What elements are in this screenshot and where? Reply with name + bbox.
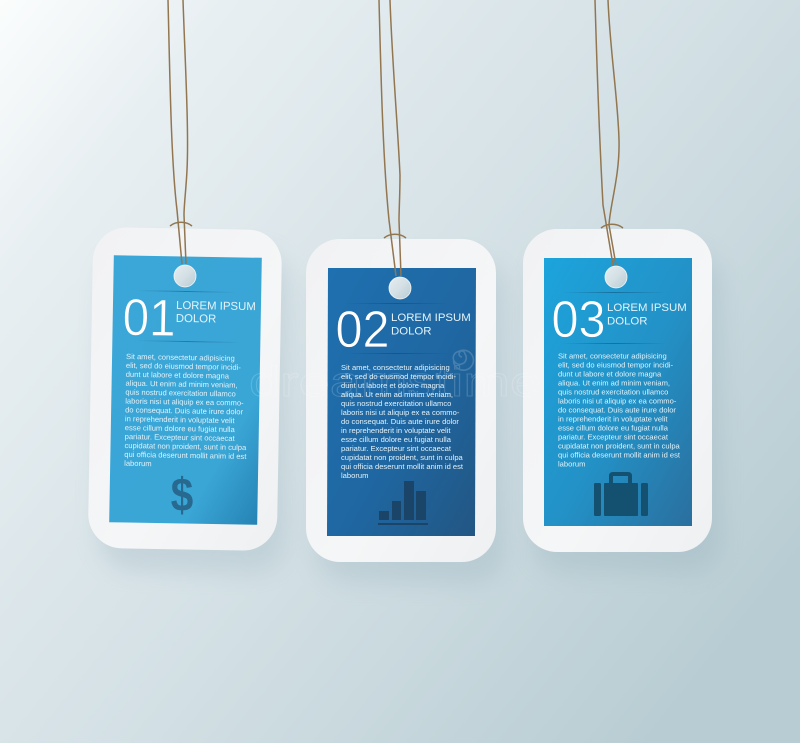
tag 3 [523,0,721,573]
tag 3 body text: cupidatat non proident, sunt in culpa [558,442,681,450]
tag 2 string [379,0,406,276]
tag 1 body text: in reprehenderit in voluptate velit [125,414,235,425]
icon: bar chart [378,481,428,525]
tag 2 body text: qui officia deserunt mollit anim id est [341,462,464,471]
tag 2 content [336,301,471,480]
tag 3 body text: qui officia deserunt mollit anim id est [558,450,681,460]
tag 1 body text: dunt ut labore et dolore magna [126,370,230,381]
tag 1 body text: esse cillum dolore eu fugiat nulla [125,423,236,434]
tag 2 card [306,239,496,562]
tag 2 body text: quis nostrud exercitation ullamco [341,399,451,408]
tag 1 body text: laborum [124,459,152,468]
tag 1 number: 01 [122,289,176,348]
tag 2 heading: LOREM IPSUM [391,312,471,324]
tag 3 string [595,0,623,265]
tag 1 body text: aliqua. Ut enim ad minim veniam, [126,379,238,390]
tag 2 body text: esse cillum dolore eu fugiat nulla [341,435,452,444]
tag 1 punch hole [174,265,196,287]
tag 3 number: 03 [552,291,606,349]
tag 3 card [523,229,712,552]
tag 2 body text: cupidatat non proident, sunt in culpa [341,453,464,462]
tag 2 blue panel [327,268,476,536]
tag 2 body text: laboris nisi ut aliquip ex ea commo- [341,408,460,417]
tag 3 body text: pariatur. Excepteur sint occaecat [558,432,669,442]
tag 3 body text: quis nostrud exercitation ullamco [558,388,668,396]
tag 1 body text: pariatur. Excepteur sint occaecat [125,432,236,443]
icon: dollar sign: $ [171,469,193,522]
tag 3 body text: Sit amet, consectetur adipisicing [558,352,667,360]
tag 3 shadow [532,250,721,573]
tag 2 shadow [315,260,505,583]
tag 1 body text: do consequat. Duis aute irure dolor [125,405,244,416]
tag 1 body text: laboris nisi ut aliquip ex ea commo- [125,396,244,408]
tag 1 body text: quis nostrud exercitation ullamco [125,388,236,398]
tag 3 heading: DOLOR [607,316,648,328]
tag 3 body text: dunt ut labore et dolore magna [558,370,662,378]
tag 3 body text: elit, sed do eiusmod tempor incidi- [558,360,673,370]
tag 3 body text: in reprehenderit in voluptate velit [558,414,668,424]
tag 1 body text: cupidatat non proident, sunt in culpa [124,441,247,452]
tag 1 card [88,227,282,551]
tag 3 body text: esse cillum dolore eu fugiat nulla [558,424,669,432]
tag 1 blue panel [109,255,262,525]
icon: briefcase [594,472,648,516]
tag 2 body text: aliqua. Ut enim ad minim veniam, [341,390,453,399]
tag 2 body text: laborum [341,471,368,480]
tag 3 heading: LOREM IPSUM [607,302,687,314]
tag 1 content [120,289,256,470]
tag 1 shadow [97,249,291,573]
tag 1 string [168,0,192,264]
tag 2 body text: elit, sed do eiusmod tempor incidi- [341,372,456,381]
tag 3 body text: aliqua. Ut enim ad minim veniam, [558,378,670,388]
icon: watermark spiral [453,350,473,370]
tag 3 body text: do consequat. Duis aute irure dolor [558,406,676,414]
tag 2 punch hole [389,277,411,299]
tag 3 content [552,291,687,468]
tag 2 body text: do consequat. Duis aute irure dolor [341,417,459,426]
tag 3 body text: laborum [558,460,585,468]
tag 3 blue panel [544,258,692,526]
watermark [249,350,541,405]
tag 3 punch hole [605,266,627,288]
tag 1 heading: LOREM IPSUM [176,300,256,313]
tag 1 heading: DOLOR [176,313,216,326]
tag 2 body text: Sit amet, consectetur adipisicing [341,363,450,372]
tag 1 body text: qui officia deserunt mollit anim id est [124,450,247,461]
tag 2 body text: dunt ut labore et dolore magna [341,381,445,390]
tag 3 body text: laboris nisi ut aliquip ex ea commo- [558,396,677,406]
tag 1 [88,0,291,573]
tag 2 heading: DOLOR [391,326,432,338]
watermark: dreamstime [249,358,541,405]
tag 2 body text: pariatur. Excepteur sint occaecat [341,444,452,453]
tag 1 body text: elit, sed do eiusmod tempor incidi- [126,361,241,372]
tag 2 [306,0,505,583]
tag 2 number: 02 [336,301,390,359]
tag 2 body text: in reprehenderit in voluptate velit [341,426,451,435]
tag 1 body text: Sit amet, consectetur adipisicing [126,352,235,363]
